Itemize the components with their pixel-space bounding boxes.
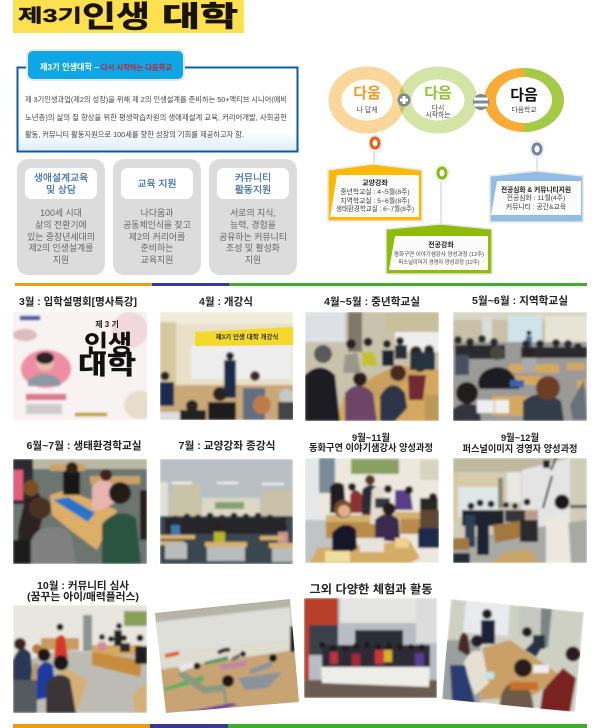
- box: 전공강좌: 전공강좌: [428, 240, 454, 249]
- caption: 10월: [27, 579, 139, 603]
- photo: middle-age class: [305, 312, 439, 421]
- caption: 7월: 7월 : 교양강좌 종강식: [178, 439, 276, 452]
- caption: 9월~11월: 동화구연 이야기샘강사 양성과정: [309, 442, 433, 454]
- card: community support: 활동지원: [235, 183, 271, 196]
- box: 전공심화 & 커뮤니티지원: 커뮤니티 : 공간&교육: [506, 202, 566, 211]
- tab heading: 다시 시작하는 다음학교: [101, 63, 172, 72]
- card: community support: 지원: [245, 255, 261, 265]
- caption: 5월~6월: 5월~6월 : 지역학교실: [472, 294, 568, 307]
- title banner: [13, 0, 244, 34]
- card: education support: 준비하는: [141, 243, 173, 253]
- equals sign: [473, 94, 489, 110]
- box: 교양강좌: 중년학교실 : 4~5월(8주): [340, 187, 410, 196]
- caption: 10월: (꿈꾸는 아이/매력플러스): [27, 590, 139, 603]
- connectors: [374, 150, 537, 226]
- card: community support: 서로의 지식,: [230, 208, 276, 218]
- caption: 4월~5월: 4월~5월 : 중년학교실: [324, 295, 420, 308]
- card: community support: 공유하는 커뮤니티: [219, 232, 287, 242]
- card: education support: 나다움과: [141, 208, 173, 218]
- panel: introduction: [18, 50, 298, 152]
- pin: green: [434, 164, 450, 182]
- caption: 10월: 10월 : 커뮤니티 심사: [37, 579, 129, 592]
- divider: bottom color bar: [13, 724, 587, 728]
- photo: opening ceremony: 제3기 인생 대학 개강식: [216, 332, 278, 341]
- photo: regional class: [453, 312, 587, 421]
- box: 교양강좌: 교양강좌: [362, 178, 388, 187]
- card: life design: 제2의 인생설계를: [29, 242, 93, 253]
- card: education support: 교육 지원: [137, 178, 177, 190]
- pin: orange: [368, 134, 382, 152]
- caption: 3월: 3월 : 입학설명회[명사특강]: [19, 295, 137, 308]
- photo: poster: [13, 312, 156, 420]
- photo: poster: 인생: [84, 331, 132, 358]
- caption: 9월~11월: 9월~11월: [352, 432, 390, 444]
- pin: blue gray: [530, 140, 544, 158]
- card: life design: 있는 중장년세대의: [27, 231, 95, 242]
- caption: 4월: 4월 : 개강식: [199, 295, 253, 308]
- plus sign: [398, 94, 410, 106]
- photo: poster: 제 3 기: [95, 319, 119, 329]
- title banner: 인생: [82, 1, 150, 34]
- ring: 나 답게: [335, 73, 399, 127]
- card: life design: 생애설계교육: [34, 172, 88, 184]
- caption: 9월~12월: [462, 432, 578, 455]
- box: 전공심화 & 커뮤니티지원: 전공심화 : 11월(4주): [507, 193, 565, 202]
- photo: poster: 대학: [78, 350, 136, 380]
- intro text: [25, 94, 287, 139]
- caption: 9월~12월: 9월~12월: [501, 432, 539, 444]
- photo: opening ceremony: [160, 312, 294, 420]
- photo: personal image workshop: [453, 458, 587, 563]
- box: 전공심화 & 커뮤니티지원: 전공심화 & 커뮤니티지원: [501, 185, 571, 194]
- intro text: 활동, 커뮤니티 활동지원으로 100세를 향한 성장의 기회를 제공하고자 함.: [25, 129, 244, 139]
- ring: 다시 시작하는: 다음: [424, 85, 452, 102]
- box: 교양강좌: [328, 164, 422, 221]
- caption: 9월~11월: [309, 432, 433, 454]
- tab heading: [27, 50, 184, 80]
- caption: 6월~7월: 6월~7월 : 생태환경학교실: [26, 439, 142, 452]
- card: education support: 제2의 커리어를: [129, 232, 185, 242]
- tab heading: 제3기 인생대학 –: [40, 61, 99, 72]
- card: life design: 삶의 전환기에: [35, 219, 87, 230]
- card: community support: 조성 및 활성화: [226, 242, 280, 253]
- ring: 나 답게: 나 답게: [357, 105, 377, 114]
- card: education support: 공동체인식을 찾고: [123, 220, 191, 230]
- photo: storytelling workshop: [305, 458, 439, 563]
- title banner: 제3기: [18, 6, 82, 26]
- photo: meeting room: [442, 599, 584, 712]
- ring: 다시 시작하는: 다시: [432, 103, 444, 112]
- box: 전공강좌: 동화구연 이야기샘강사 양성과정 (12주): [394, 250, 484, 258]
- card: life design: 100세 시대: [40, 208, 82, 218]
- photo: community review: [13, 605, 147, 713]
- title banner: 대학: [162, 1, 238, 32]
- card: education support: 교육지원: [141, 255, 173, 265]
- card: education support: [113, 159, 201, 275]
- ring: 다음학교: 다음학교: [511, 105, 537, 114]
- card: community support: [209, 159, 297, 275]
- caption: 9월~12월: 퍼스널이미지 경영자 양성과정: [462, 443, 578, 455]
- box: 전공강좌: 퍼스널이미지 경영자 양성과정 (12주): [398, 258, 480, 266]
- card: community support: 커뮤니티: [235, 172, 271, 184]
- diagram: rings: [335, 68, 564, 132]
- box: 교양강좌: 지역학교실 : 5~6월(8주): [340, 196, 410, 205]
- card: community support: 능력, 경험을: [230, 219, 276, 230]
- box: 교양강좌: 생태환경학교실 : 6~7월(8주): [336, 204, 414, 213]
- box: 전공심화 & 커뮤니티지원: [490, 171, 583, 222]
- ring: 나 답게: 다움: [353, 85, 381, 102]
- card: life design: [17, 159, 105, 275]
- intro text: 제 3기인생과업(제2의 성장)을 위해 제 2의 인생설계를 준비하는 50+액티브 시니어(예비: [25, 94, 287, 104]
- photo: ceramic center group: [304, 598, 437, 698]
- photo: closing ceremony: [160, 459, 293, 564]
- photo: ecology class: [13, 459, 147, 564]
- ring: 다시 시작하는: [405, 73, 471, 127]
- card: life design: 지원: [53, 255, 69, 265]
- photo: yoga class: [155, 599, 299, 716]
- divider: top color bar: [15, 283, 587, 286]
- intro text: 노년층)의 삶의 질 향상을 위한 평생학습차원의 생애재설계 교육, 커리어개발, 사회공헌: [25, 112, 287, 122]
- caption: other activities: 그외 다양한 체험과 활동: [310, 582, 433, 596]
- ring: 다음학교: [484, 68, 564, 132]
- ring: 다시 시작하는: 시작하는: [425, 110, 451, 119]
- box: 전공강좌: [386, 224, 492, 274]
- card: life design: 및 상담: [46, 184, 76, 196]
- ring: 다음학교: 다음: [510, 87, 538, 104]
